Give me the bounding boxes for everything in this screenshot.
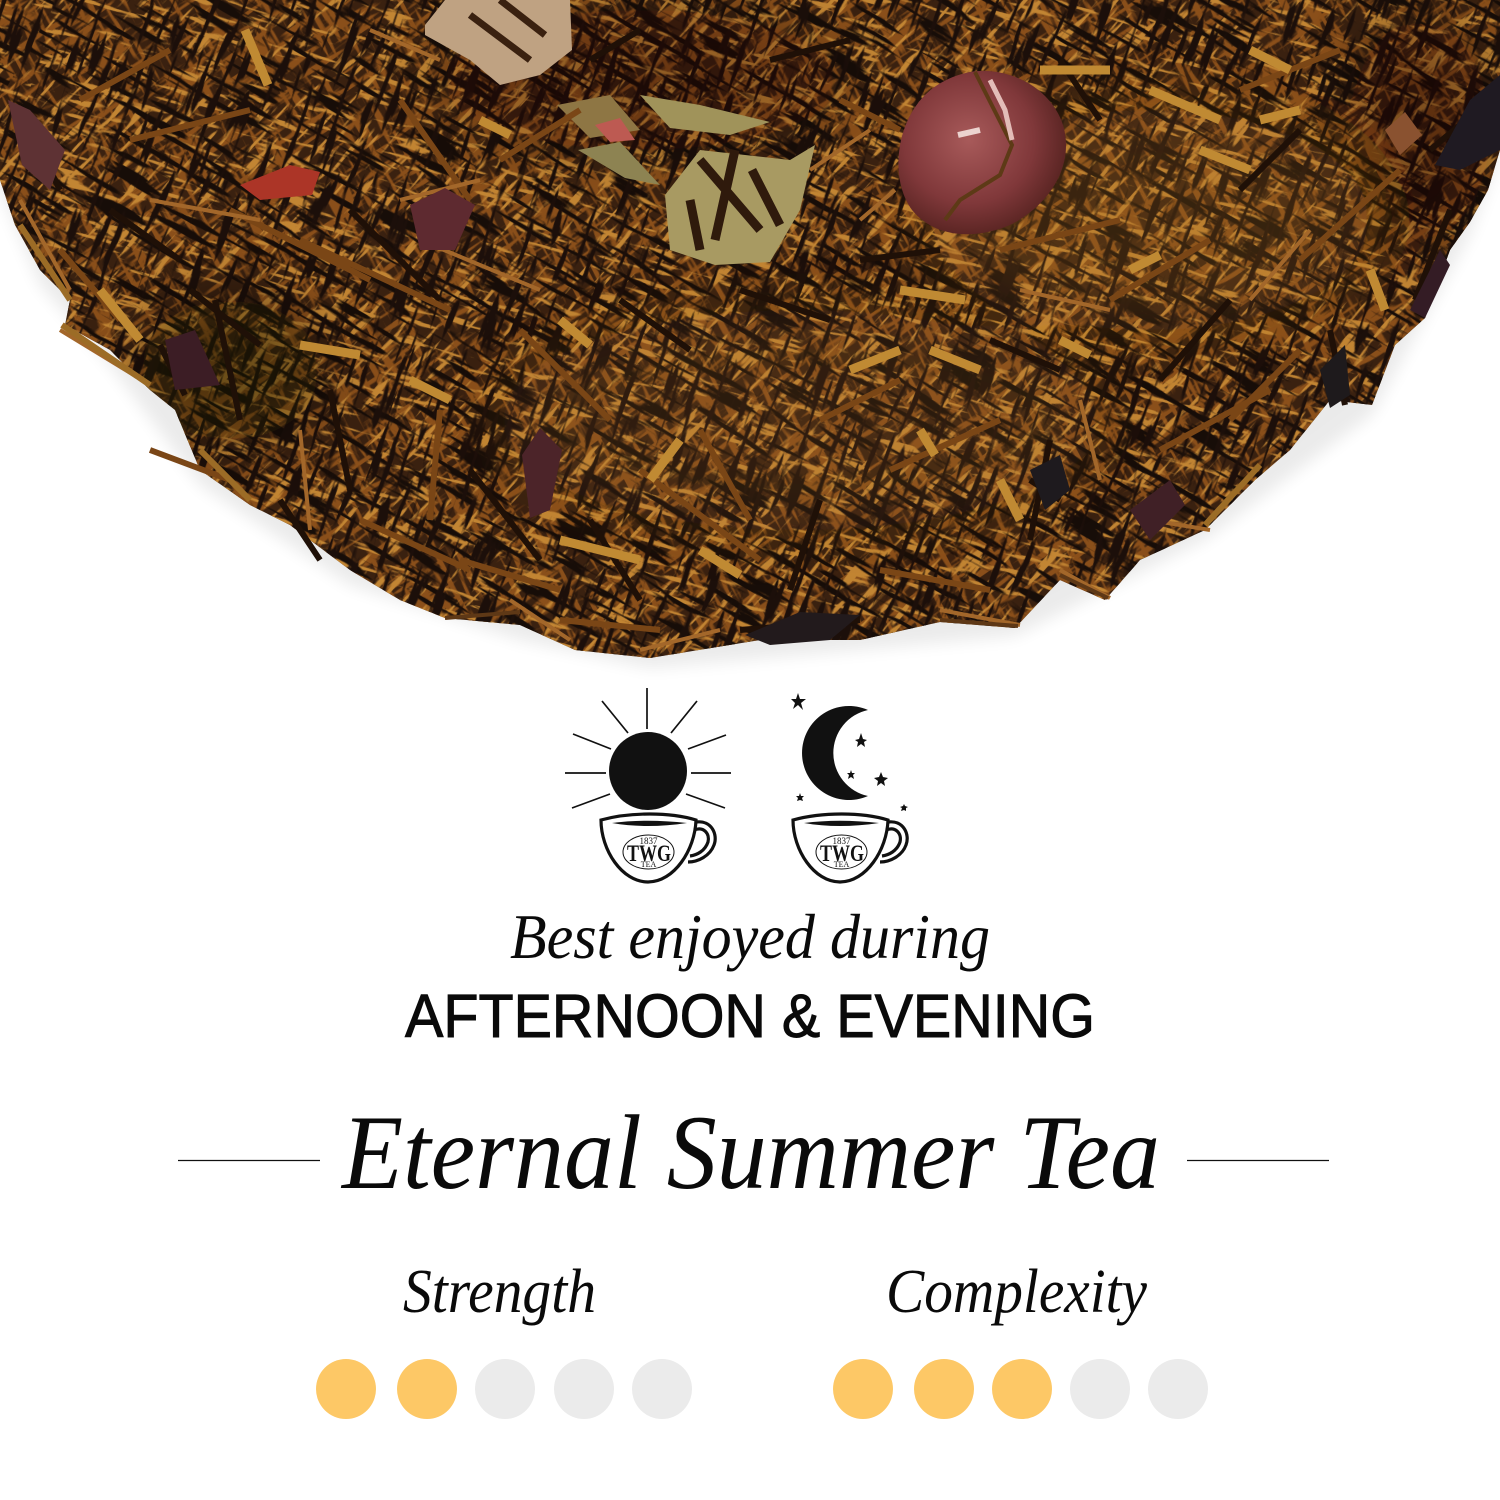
teacup: 1837 bbox=[640, 836, 658, 846]
teacup: TWG bbox=[820, 841, 864, 866]
icon: sun above teacup bbox=[565, 688, 731, 882]
rating: complexity bbox=[833, 1258, 1208, 1419]
teacup: 1837 bbox=[832, 836, 851, 846]
soft shadow under tea leaves bbox=[0, 0, 1500, 668]
strength dots: 2 of 5 bbox=[316, 1359, 692, 1419]
stars bbox=[791, 693, 908, 811]
complexity label: Complexity bbox=[886, 1258, 1147, 1326]
tea needles bbox=[20, 30, 1490, 650]
teacup: TEA bbox=[834, 860, 849, 869]
text: best enjoyed during: Best enjoyed during bbox=[510, 901, 990, 972]
title with side rules: Eternal Summer Tea bbox=[340, 1094, 1160, 1211]
photo: loose rooibos tea leaves bbox=[0, 0, 1500, 670]
candied cherry bbox=[898, 71, 1066, 234]
sun bbox=[609, 732, 687, 810]
teacup: TEA bbox=[641, 860, 656, 869]
complexity dots: 3 of 5 bbox=[833, 1359, 1208, 1419]
teacup: TWG bbox=[627, 841, 671, 866]
sun rays bbox=[565, 688, 731, 808]
pale leaf pieces bbox=[425, 0, 815, 265]
icon: moon and stars above teacup bbox=[791, 693, 908, 882]
teacup bbox=[793, 814, 907, 882]
rating: strength bbox=[316, 1258, 692, 1419]
text: afternoon and evening: AFTERNOON & EVENING bbox=[405, 982, 1095, 1050]
teacup bbox=[601, 814, 715, 882]
strength label: Strength bbox=[403, 1258, 596, 1326]
crescent moon bbox=[802, 706, 868, 800]
red and purple petals bbox=[8, 75, 1500, 645]
golden edge fragments bbox=[20, 225, 1260, 626]
